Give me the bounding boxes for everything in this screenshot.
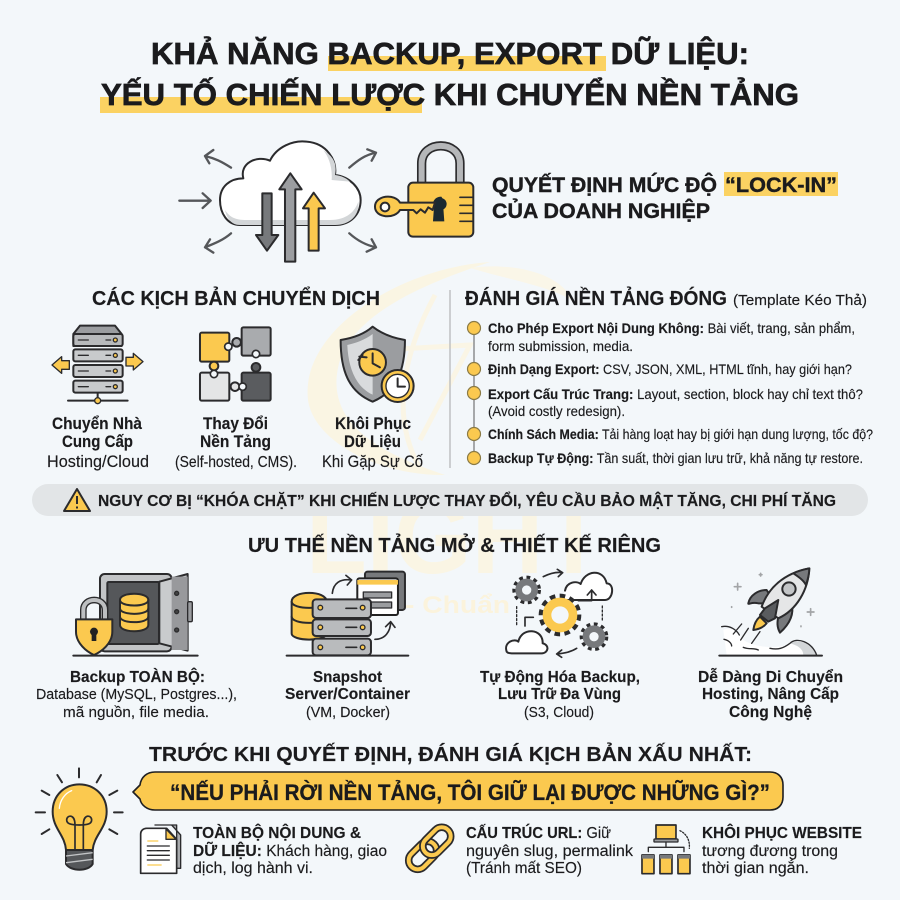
icon: shield with clock <box>341 327 414 402</box>
title <box>100 35 799 113</box>
item: url structure: (Tránh mất SEO) <box>466 860 582 877</box>
icon: automation gears <box>506 569 612 657</box>
label: easy migration: Công Nghệ <box>729 704 812 721</box>
item: page structure: (Avoid costly redesign). <box>488 403 625 419</box>
panel: evaluation checklist <box>468 320 873 466</box>
callout: key question: “NẾU PHẢI RỜI NỀN TẢNG, TÔI GIỮ LẠI ĐƯỢC NHỮNG GÌ?” <box>170 780 770 805</box>
heading: closed platform evaluation: ĐÁNH GIÁ NỀN TẢNG ĐÓNG <box>465 286 727 310</box>
item: export format: Định Dạng Export: CSV, JSON, XML, HTML tĩnh, hay giới hạn? <box>488 361 852 377</box>
icon: server snapshot <box>287 572 408 656</box>
label: change provider <box>47 414 149 471</box>
label: snapshot: Snapshot <box>313 669 383 686</box>
label: change provider: Hosting/Cloud <box>47 452 149 471</box>
label: change provider: Chuyển Nhà <box>52 414 142 433</box>
icon: rocket <box>719 568 822 656</box>
label: change platform: Nền Tảng <box>200 432 271 451</box>
item: media policy: Chính Sách Media: Tải hàng loạt hay bị giới hạn dung lượng, tốc độ? <box>488 426 873 442</box>
icon: light bulb <box>36 768 123 870</box>
item: url structure: CẤU TRÚC URL: Giữ <box>466 824 611 842</box>
item: url structure <box>405 824 633 877</box>
icon: cloud with transfer arrows <box>179 141 376 262</box>
label: automated backup: (S3, Cloud) <box>524 704 594 721</box>
watermark: LIGHT <box>306 479 604 596</box>
label: change platform <box>175 414 297 471</box>
label: automated backup: Lưu Trữ Đa Vùng <box>498 686 621 703</box>
icon: safe with database <box>73 574 198 656</box>
panel: open platform advantages <box>36 568 843 721</box>
label: data recovery: Khôi Phục <box>335 414 411 433</box>
heading: migration scenarios: CÁC KỊCH BẢN CHUYỂN DỊCH <box>92 287 380 310</box>
watermark: - Chuẩn <box>405 592 510 619</box>
item: website recovery: tương đương trong <box>702 843 838 860</box>
icon: padlock with key <box>375 146 473 237</box>
callout: lock-in <box>492 172 838 223</box>
label: easy migration: Hosting, Nâng Cấp <box>702 686 839 703</box>
item: export content: Cho Phép Export Nội Dung Không: Bài viết, trang, sản phẩm, <box>488 320 855 336</box>
heading: open platform advantages: ƯU THẾ NỀN TẢNG MỞ & THIẾT KẾ RIÊNG <box>248 533 661 557</box>
icon: warning triangle <box>64 489 90 511</box>
label: data recovery <box>322 414 423 471</box>
label: snapshot: Server/Container <box>285 686 410 703</box>
panel: migration scenarios <box>47 326 423 471</box>
label: snapshot <box>285 669 410 721</box>
item: page structure <box>488 386 863 419</box>
label: full backup: mã nguồn, file media. <box>63 704 209 721</box>
watermark <box>306 262 604 619</box>
icon: site hierarchy <box>642 825 690 874</box>
warning banner: NGUY CƠ BỊ “KHÓA CHẶT” KHI CHIẾN LƯỢC THAY ĐỔI, YÊU CẦU BẢO MẬT TĂNG, CHI PHÍ TĂNG <box>98 491 836 510</box>
callout: key question <box>133 772 783 810</box>
label: easy migration <box>698 667 843 721</box>
label: full backup <box>36 667 237 721</box>
label: automated backup <box>480 669 640 721</box>
icon: puzzle <box>200 327 271 401</box>
item: website recovery: KHÔI PHỤC WEBSITE <box>702 824 862 842</box>
label: data recovery: Khi Gặp Sự Cố <box>322 452 423 471</box>
label: change provider: Cung Cấp <box>62 432 133 451</box>
icon: server <box>52 326 143 404</box>
label: easy migration: Dễ Dàng Di Chuyển <box>698 667 843 686</box>
item: all content and data <box>141 824 387 877</box>
icon: documents <box>141 825 181 873</box>
label: change platform: (Self-hosted, CMS). <box>175 454 297 471</box>
item: export content: form submission, media. <box>488 338 633 354</box>
label: snapshot: (VM, Docker) <box>306 704 390 721</box>
item: page structure: Export Cấu Trúc Trang: Layout, section, block hay chỉ text thô? <box>488 386 863 402</box>
callout: lock-in: CỦA DOANH NGHIỆP <box>492 199 710 223</box>
warning banner <box>32 484 868 516</box>
item: auto backup: Backup Tự Động: Tần suất, thời gian lưu trữ, khả năng tự restore. <box>488 450 863 466</box>
title: KHẢ NĂNG BACKUP, EXPORT DỮ LIỆU: <box>151 35 749 71</box>
callout: lock-in: QUYẾT ĐỊNH MỨC ĐỘ <box>492 173 717 197</box>
heading: closed platform evaluation: (Template Kéo Thả) <box>733 292 867 309</box>
label: data recovery: Dữ Liệu <box>344 432 401 451</box>
label: change platform: Thay Đổi <box>203 414 268 433</box>
item: all content and data: TOÀN BỘ NỘI DUNG & <box>193 824 361 842</box>
item: website recovery: thời gian ngắn. <box>702 860 809 877</box>
item: all content and data: DỮ LIỆU: Khách hàng, giao <box>193 842 387 860</box>
item: url structure: nguyên slug, permalink <box>466 843 633 860</box>
label: full backup: Database (MySQL, Postgres...), <box>36 686 237 703</box>
item: website recovery <box>642 824 862 877</box>
title: YẾU TỐ CHIẾN LƯỢC KHI CHUYỂN NỀN TẢNG <box>101 76 799 112</box>
heading: worst case: TRƯỚC KHI QUYẾT ĐỊNH, ĐÁNH GIÁ KỊCH BẢN XẤU NHẤT: <box>149 742 752 766</box>
item: all content and data: dịch, log hành vi. <box>193 860 313 877</box>
label: full backup: Backup TOÀN BỘ: <box>70 667 205 686</box>
label: automated backup: Tự Động Hóa Backup, <box>480 669 640 686</box>
icon: chain link <box>405 824 454 873</box>
callout: lock-in: “LOCK-IN” <box>725 174 837 197</box>
item: export content <box>488 320 855 354</box>
heading: closed platform evaluation <box>465 286 867 310</box>
